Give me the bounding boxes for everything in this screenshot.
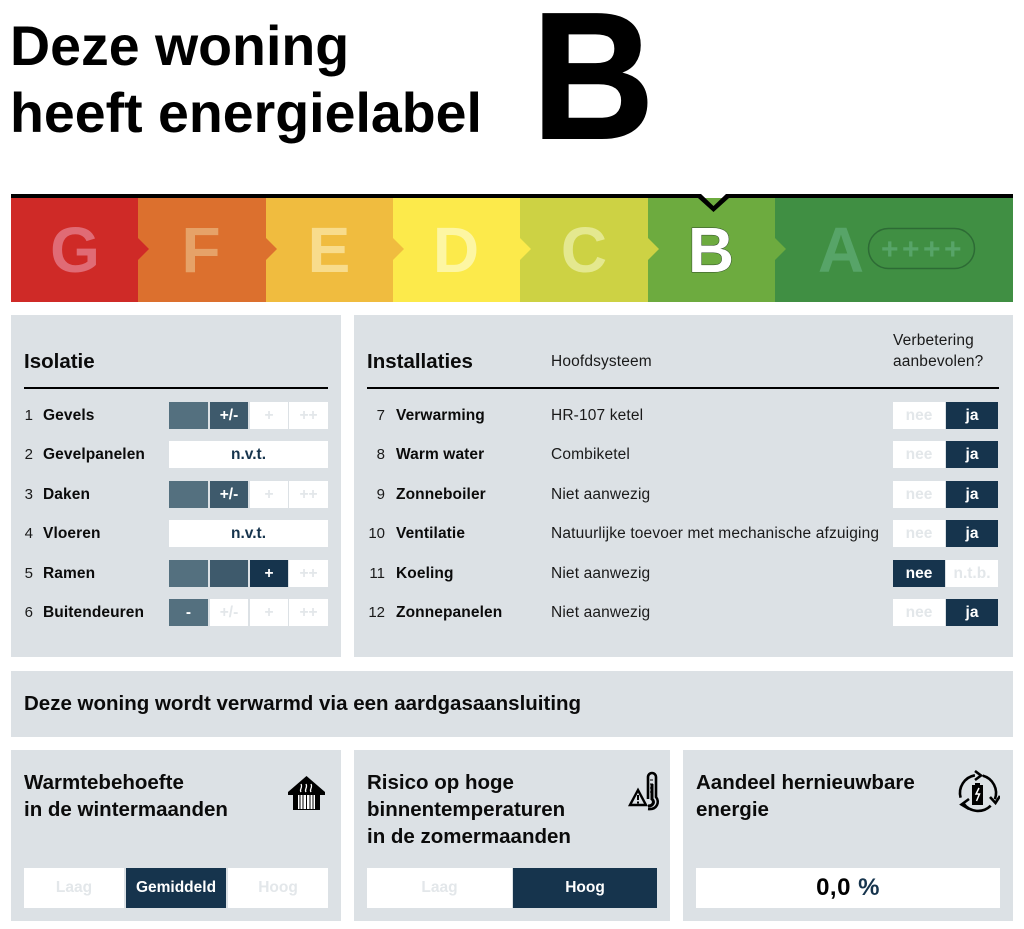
percentage value	[696, 868, 1000, 908]
panel: installaties: ja	[966, 407, 978, 424]
scale top rule with pointer	[11, 194, 1013, 212]
risico heading: Risico op hoge	[367, 771, 514, 794]
panel: installaties: Verwarming	[396, 407, 485, 424]
panel: risico oververhitting: Hoog	[565, 879, 605, 896]
risico scale	[367, 868, 657, 908]
panel: warmtebehoefte: Hoog	[258, 879, 298, 896]
icon: battery in recycling arrows	[958, 770, 1000, 812]
panel: installaties: nee	[906, 407, 932, 424]
row 2 gevelpanelen	[25, 441, 328, 468]
panel: isolatie: ++	[299, 407, 318, 424]
panel: installaties	[354, 315, 1013, 657]
installaties heading: Installaties	[367, 350, 473, 373]
panel: warmtebehoefte: Gemiddeld	[136, 879, 216, 896]
warmte scale	[24, 868, 328, 908]
panel: installaties: nee	[906, 486, 932, 503]
risico heading: binnentemperaturen	[367, 798, 565, 821]
panel: installaties: nee	[906, 525, 932, 542]
panel: installaties: Koeling	[396, 565, 454, 582]
band D	[393, 198, 520, 302]
row 7 verwarming	[377, 402, 998, 429]
panel: isolatie: +/-	[220, 604, 238, 621]
band D: D	[433, 214, 479, 286]
panel: installaties: Combiketel	[551, 446, 630, 463]
title: Deze woning	[10, 15, 349, 77]
panel: isolatie: 4	[25, 525, 33, 542]
panel: heating banner	[11, 671, 1013, 737]
row 4 vloeren	[24, 520, 328, 547]
panel: isolatie: 3	[25, 486, 33, 503]
panel: isolatie: +/-	[220, 486, 238, 503]
panel: isolatie: +	[264, 407, 274, 424]
band A with ++++: ++++	[881, 233, 965, 266]
panel: isolatie: Vloeren	[43, 525, 101, 542]
panel: warmtebehoefte: Laag	[56, 879, 92, 896]
panel: aandeel hernieuwbare energie	[683, 750, 1013, 921]
panel: isolatie: 6	[25, 604, 33, 621]
risico heading: in de zomermaanden	[367, 825, 571, 848]
panel: isolatie: ++	[299, 565, 318, 582]
warmtebehoefte heading	[24, 771, 228, 821]
panel: isolatie: n.v.t.	[231, 525, 266, 542]
band B (active)	[648, 198, 775, 302]
panel: installaties: HR-107 ketel	[551, 407, 643, 424]
column header verbetering	[893, 332, 983, 370]
warmtebehoefte heading: Warmtebehoefte	[24, 771, 184, 794]
panel: installaties: nee	[906, 604, 932, 621]
panel: installaties: Natuurlijke toevoer met mechanische afzuiging	[551, 525, 879, 542]
row 8 warm water	[377, 441, 998, 468]
warmtebehoefte heading: in de wintermaanden	[24, 798, 228, 821]
panel: installaties: 11	[369, 565, 385, 582]
banner text: Deze woning wordt verwarmd via een aardgasaansluiting	[24, 692, 581, 715]
panel: installaties: nee	[906, 446, 932, 463]
panel: risico oververhitting	[354, 750, 670, 921]
panel: installaties: ja	[966, 525, 978, 542]
row 11 koeling	[369, 560, 998, 587]
title	[10, 15, 482, 144]
panel: installaties: ja	[966, 446, 978, 463]
panel: isolatie: +/-	[220, 407, 238, 424]
band A with ++++: A	[818, 214, 864, 286]
column header verbetering: aanbevolen?	[893, 353, 983, 370]
band B (active): B	[688, 214, 734, 286]
panel: isolatie: Gevelpanelen	[43, 446, 145, 463]
panel: installaties: ja	[966, 486, 978, 503]
panel: isolatie: ++	[299, 486, 318, 503]
band C: C	[561, 214, 607, 286]
panel: isolatie: Buitendeuren	[43, 604, 144, 621]
panel: installaties: Zonnepanelen	[396, 604, 502, 621]
panel: installaties: 8	[377, 446, 385, 463]
panel: isolatie: 1	[25, 407, 33, 424]
panel: installaties: n.t.b.	[953, 565, 991, 582]
panel: isolatie: Daken	[43, 486, 90, 503]
row 6 buitendeuren	[25, 599, 328, 626]
panel: installaties: ja	[966, 604, 978, 621]
column header hoofdsysteem: Hoofdsysteem	[551, 353, 652, 370]
panel: installaties: Warm water	[396, 446, 484, 463]
column header verbetering: Verbetering	[893, 332, 974, 349]
title: heeft energielabel	[10, 82, 482, 144]
panel: installaties: Zonneboiler	[396, 486, 486, 503]
band C	[520, 198, 648, 302]
panel: installaties: Niet aanwezig	[551, 486, 650, 503]
panel: isolatie	[11, 315, 341, 657]
panel: isolatie: n.v.t.	[231, 446, 266, 463]
band F	[138, 198, 266, 302]
aandeel heading: energie	[696, 798, 769, 821]
panel: isolatie: +	[264, 486, 274, 503]
panel: installaties: Niet aanwezig	[551, 604, 650, 621]
row 9 zonneboiler	[377, 481, 998, 508]
aandeel heading	[696, 771, 915, 821]
installaties rule	[367, 387, 999, 388]
band A with ++++	[775, 198, 1013, 302]
row 3 daken	[25, 481, 328, 508]
panel: isolatie: +	[264, 604, 274, 621]
isolatie rule	[24, 387, 328, 388]
band E	[266, 198, 393, 302]
panel: isolatie: 5	[25, 565, 33, 582]
panel: installaties: nee	[906, 565, 932, 582]
isolatie heading: Isolatie	[24, 350, 95, 373]
panel: installaties: Ventilatie	[396, 525, 465, 542]
row 12 zonnepanelen	[368, 599, 998, 626]
icon: house with radiator	[288, 776, 325, 810]
panel: isolatie: +	[264, 565, 274, 582]
panel: isolatie: ++	[299, 604, 318, 621]
panel: isolatie: Gevels	[43, 407, 94, 424]
panel: installaties: 9	[377, 486, 385, 503]
panel: installaties: 7	[377, 407, 385, 424]
risico heading	[367, 771, 571, 848]
band G: G	[50, 214, 100, 286]
panel: isolatie: -	[186, 604, 191, 621]
panel: risico oververhitting: Laag	[421, 879, 458, 896]
band G	[11, 198, 138, 302]
band F: F	[181, 214, 221, 286]
panel: isolatie: Ramen	[43, 565, 95, 582]
row 1 gevels	[25, 402, 328, 429]
percentage value: 0,0 %	[816, 874, 880, 901]
row 5 ramen	[25, 560, 328, 587]
panel: isolatie: 2	[25, 446, 33, 463]
panel: installaties: Niet aanwezig	[551, 565, 650, 582]
panel: installaties: 12	[368, 604, 385, 621]
icon: warning triangle and thermometer	[628, 772, 659, 810]
panel: installaties: 10	[368, 525, 385, 542]
row 10 ventilatie	[368, 520, 998, 547]
panel: warmtebehoefte	[11, 750, 341, 921]
energy scale G to A	[11, 194, 1013, 302]
band E: E	[308, 214, 350, 286]
aandeel heading: Aandeel hernieuwbare	[696, 771, 915, 794]
